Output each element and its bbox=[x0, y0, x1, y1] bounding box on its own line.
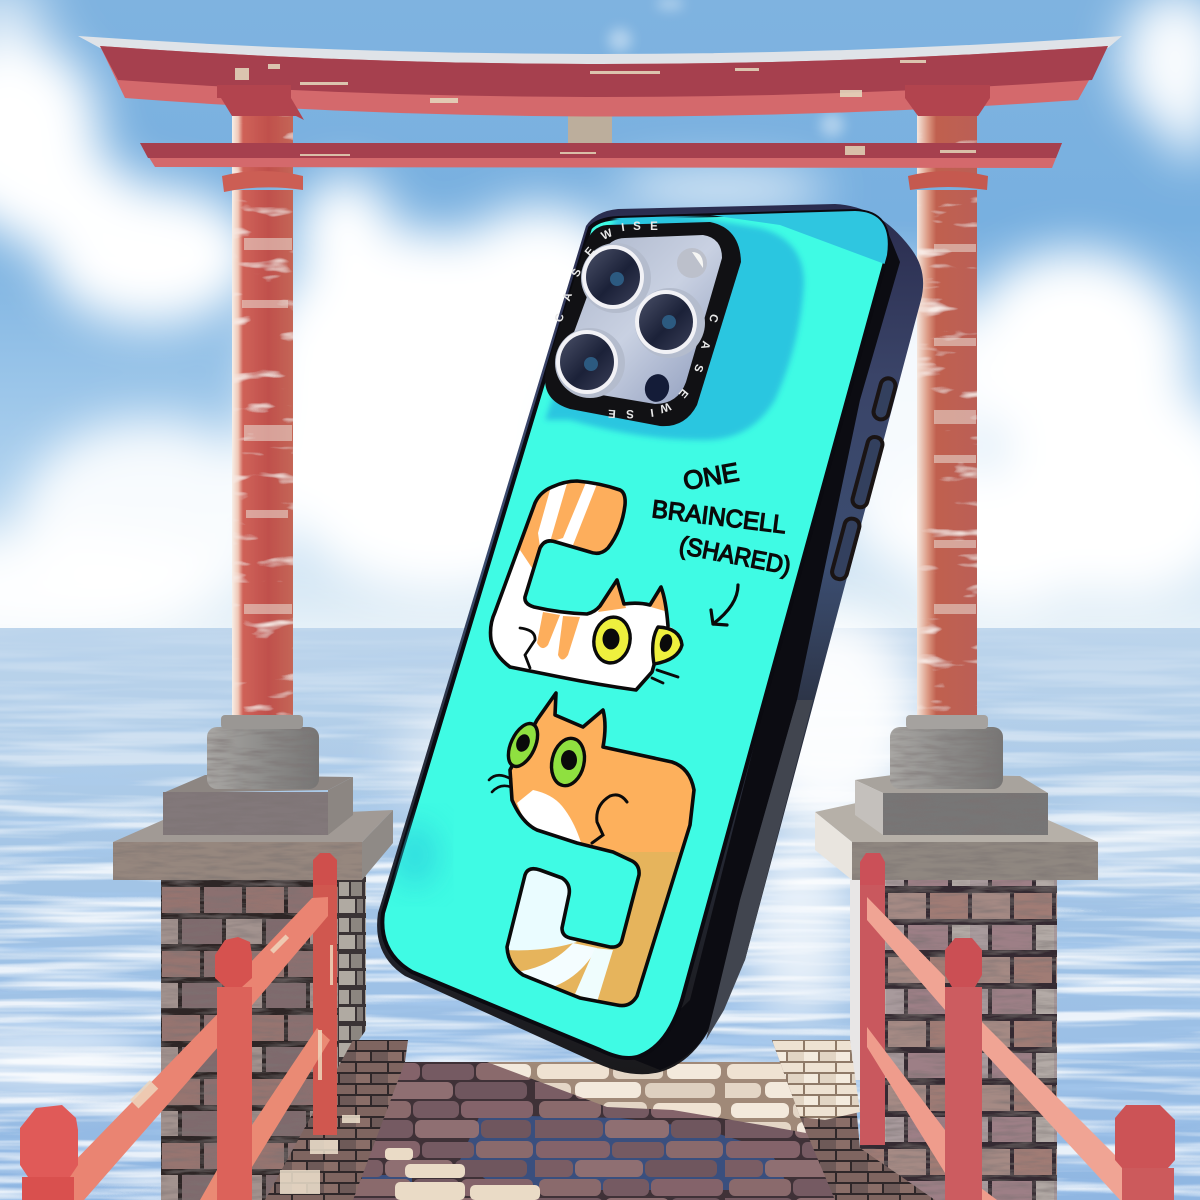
arrow bbox=[711, 585, 738, 625]
lower rail bbox=[200, 1028, 330, 1200]
cylinder bbox=[890, 715, 1003, 789]
brand ring text: W bbox=[658, 400, 672, 415]
lens 1 bbox=[581, 243, 651, 313]
slab bbox=[113, 810, 393, 880]
upper rail bbox=[44, 897, 328, 1200]
handwritten caption: (SHARED) bbox=[677, 531, 793, 580]
step bbox=[163, 775, 353, 835]
phone in case bbox=[377, 204, 923, 1074]
front post bbox=[20, 1105, 78, 1200]
right pillar bbox=[917, 96, 977, 720]
brick column bbox=[850, 880, 1057, 1200]
brand ring text: A bbox=[561, 291, 575, 303]
brand ring text: C bbox=[706, 312, 720, 324]
middle post bbox=[215, 937, 252, 1200]
pillar collars bbox=[222, 171, 988, 192]
screen bbox=[382, 205, 900, 1058]
case reflective lower edge bbox=[706, 700, 813, 1040]
lidar bbox=[642, 371, 672, 405]
upper rail bbox=[867, 897, 1155, 1200]
handwritten caption: ONE bbox=[681, 457, 741, 496]
handwritten caption bbox=[650, 457, 793, 580]
brick column bbox=[161, 872, 366, 1200]
lower beam bbox=[140, 143, 1062, 168]
sea bbox=[0, 610, 1200, 1200]
front post bbox=[1115, 1105, 1175, 1200]
clouds bbox=[0, 0, 1200, 645]
flash bbox=[677, 248, 707, 278]
brand ring text: S bbox=[691, 362, 705, 374]
camera plate bbox=[561, 235, 722, 404]
puddles bbox=[362, 1115, 790, 1195]
left railing bbox=[20, 853, 337, 1200]
brand ring text: C bbox=[553, 312, 567, 324]
brand ring text: S bbox=[633, 221, 641, 233]
right curb bbox=[772, 1040, 935, 1200]
brand ring text: E bbox=[583, 245, 597, 259]
left curb bbox=[265, 1040, 408, 1200]
brand ring text: E bbox=[607, 407, 616, 419]
orange cat (bottom) bbox=[489, 693, 700, 1012]
brand ring text bbox=[553, 221, 720, 419]
rear post bbox=[313, 853, 337, 1135]
case inner dark edge bbox=[630, 225, 900, 1070]
left pillar bbox=[232, 96, 293, 720]
sky bbox=[0, 0, 1200, 630]
orange and white cat (top) bbox=[490, 480, 682, 690]
brand ring text: I bbox=[650, 406, 654, 418]
case body bbox=[377, 204, 923, 1074]
cat eyes bbox=[502, 719, 589, 789]
camera module bbox=[545, 221, 741, 426]
torii gate bbox=[78, 36, 1122, 720]
brand ring text: W bbox=[600, 227, 615, 243]
side buttons bbox=[831, 377, 897, 581]
paved walkway bbox=[265, 1040, 935, 1200]
lens 3 bbox=[555, 328, 625, 398]
handwritten caption: BRAINCELL bbox=[650, 495, 788, 539]
brand ring text: S bbox=[626, 407, 634, 419]
stone base: right bbox=[815, 715, 1098, 1200]
top beam bbox=[78, 36, 1122, 117]
slab bbox=[815, 800, 1098, 880]
brand ring text: A bbox=[698, 339, 712, 351]
centre post bbox=[568, 106, 612, 143]
step bbox=[855, 774, 1048, 835]
brand ring text: S bbox=[570, 267, 584, 279]
right railing bbox=[860, 853, 1175, 1200]
brand ring text: E bbox=[650, 221, 658, 233]
lens 2 bbox=[635, 288, 705, 358]
pillar caps bbox=[217, 85, 990, 120]
middle post bbox=[945, 938, 982, 1200]
cat eyes bbox=[590, 614, 682, 666]
stone base: left bbox=[113, 715, 393, 1200]
sunlit stones bbox=[487, 1062, 806, 1133]
cylinder bbox=[207, 715, 319, 789]
brand ring text: E bbox=[676, 386, 690, 400]
rear post bbox=[860, 853, 885, 1145]
brand ring text: I bbox=[621, 222, 625, 234]
lower rail bbox=[867, 1027, 997, 1200]
